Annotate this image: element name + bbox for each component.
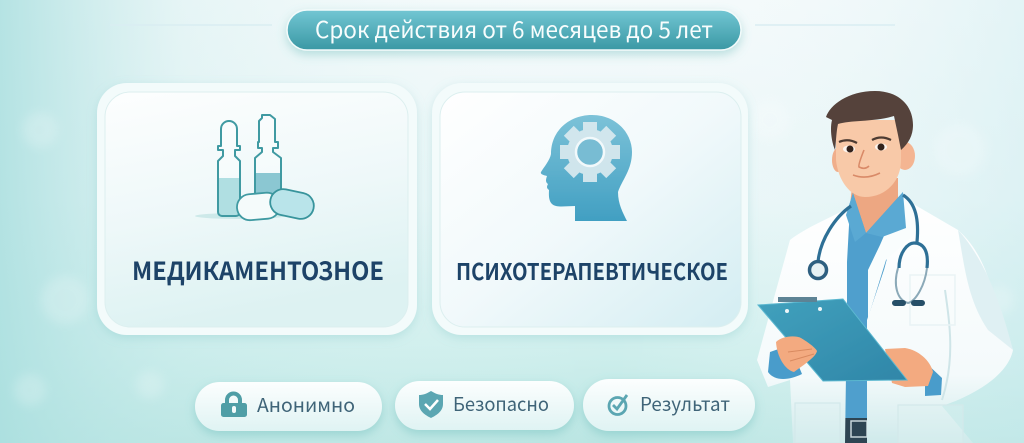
ampoule left	[218, 121, 240, 216]
icon: ampoules and pills	[195, 115, 316, 221]
badge: anonymous	[195, 382, 382, 431]
right cuff and hand	[885, 348, 942, 396]
icon: head with gear	[541, 115, 632, 221]
ampoule right	[255, 115, 281, 208]
label: result: Результат	[640, 390, 730, 417]
belt	[845, 418, 867, 443]
brows	[839, 138, 891, 143]
icon: lock	[221, 394, 247, 417]
icon: target check	[609, 395, 627, 414]
gear	[560, 122, 620, 182]
fingers over clipboard	[776, 336, 817, 372]
clipboard	[758, 297, 907, 381]
label: safe: Безопасно	[453, 390, 549, 417]
collar	[846, 192, 906, 242]
shirt	[845, 192, 906, 443]
doctor illustration	[757, 91, 1013, 443]
badge: result	[583, 379, 755, 431]
pill blue	[268, 187, 316, 221]
panel title: psychotherapy: ПСИХОТЕРАПЕВТИЧЕСКОЕ	[456, 253, 728, 287]
hair	[826, 91, 913, 150]
pill white	[236, 192, 281, 221]
duration banner	[287, 10, 741, 50]
icon: shield	[419, 391, 443, 418]
divider lines beside the duration banner	[110, 24, 895, 26]
label: anonymous: Анонимно	[257, 391, 355, 418]
coat	[757, 192, 1013, 443]
panel title: medication: МЕДИКАМЕНТОЗНОЕ	[132, 252, 384, 288]
banner text: Срок действия от 6 месяцев до 5 лет	[315, 11, 713, 45]
neck	[850, 178, 898, 236]
panel: psychotherapy	[432, 83, 748, 335]
eyes	[843, 144, 887, 152]
panel: medication treatment	[97, 83, 417, 335]
badge: safe	[395, 381, 574, 430]
head	[826, 91, 915, 197]
stethoscope	[810, 195, 927, 303]
nose and mouth	[853, 150, 880, 177]
left cuff	[768, 345, 802, 379]
